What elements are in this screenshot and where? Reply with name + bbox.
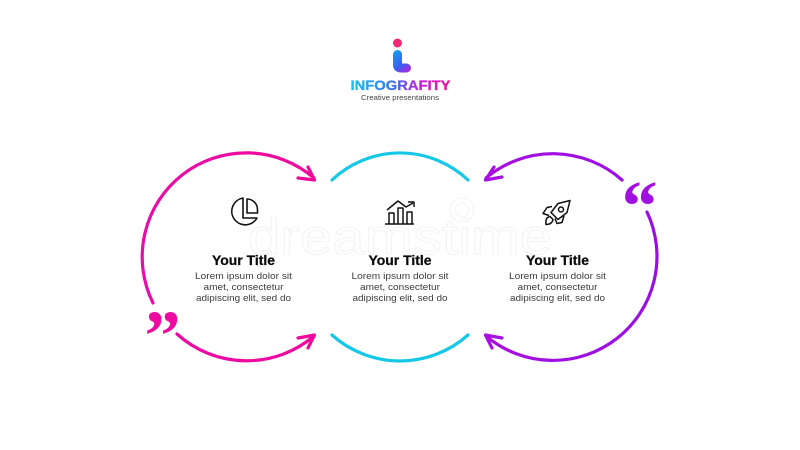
heading: Your Title <box>368 253 432 268</box>
heading: Your Title <box>526 253 589 268</box>
body: Lorem ipsum dolor sit <box>195 271 292 282</box>
center top arc <box>332 153 468 180</box>
body: adipiscing elit, sed do <box>352 293 448 304</box>
logo <box>350 38 450 102</box>
logo mark: letter i <box>393 38 406 68</box>
text block: right <box>509 253 606 304</box>
panel: right purple ring <box>486 154 657 360</box>
logo tagline: Creative presentations <box>361 93 439 102</box>
panel: center cyan arcs <box>332 153 468 361</box>
body: adipiscing elit, sed do <box>196 293 291 304</box>
top arc with arrow <box>486 154 622 180</box>
body <box>509 271 606 304</box>
text block: left <box>195 253 292 304</box>
bottom arc with arrow <box>486 212 657 360</box>
body: amet, consectetur <box>360 282 440 293</box>
body: amet, consectetur <box>204 282 284 293</box>
watermark: dreamstime <box>248 209 552 265</box>
body: adipiscing elit, sed do <box>510 293 605 304</box>
body: Lorem ipsum dolor sit <box>352 271 449 282</box>
top arc with arrow <box>142 153 314 303</box>
panel: left pink ring <box>142 153 314 361</box>
text block: center <box>352 253 449 304</box>
icon: bar chart with arrow <box>385 201 414 224</box>
bottom arc with arrow <box>177 334 314 361</box>
icon: rocket <box>543 200 570 224</box>
body <box>195 271 292 304</box>
icon: pie chart <box>232 198 258 225</box>
body <box>352 271 449 304</box>
center bottom arc <box>332 335 468 361</box>
body: Lorem ipsum dolor sit <box>509 271 606 282</box>
body: amet, consectetur <box>518 282 598 293</box>
heading: Your Title <box>212 253 275 268</box>
quote mark: left: ” <box>144 296 180 376</box>
quote mark: right: “ <box>622 166 658 246</box>
logo wordmark: INFOGRAFITY <box>350 78 450 93</box>
